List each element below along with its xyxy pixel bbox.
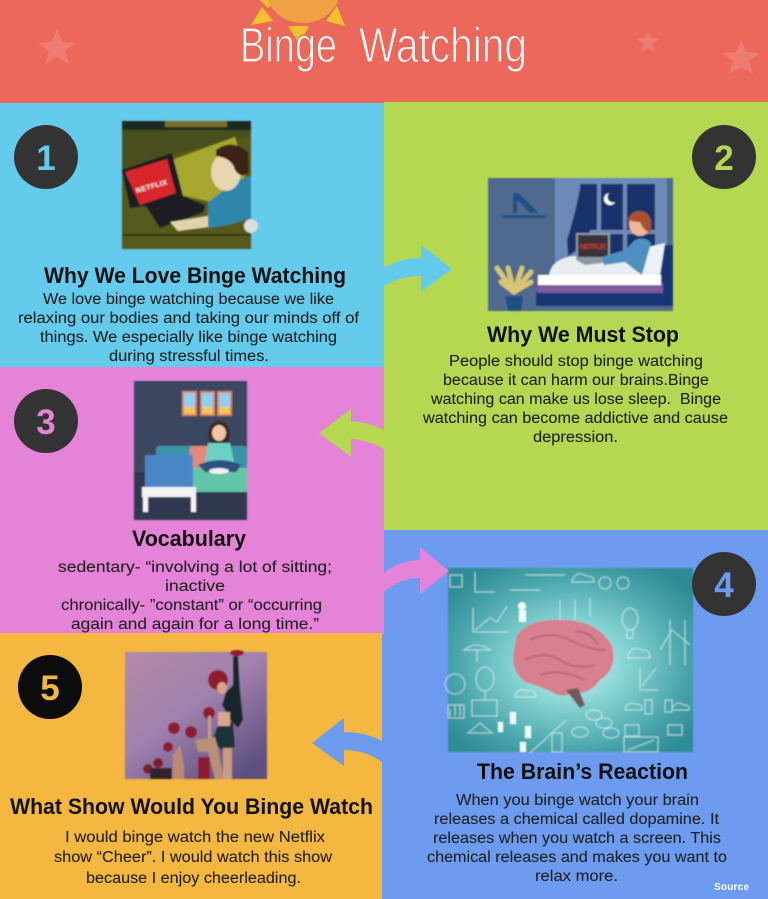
number badge 3: 3 [36,403,56,442]
body text: releases a chemical called dopamine. It [434,811,720,828]
number badge 2: 2 [714,139,734,178]
illustration: brain with white doodles [445,568,693,753]
title [240,19,527,73]
source link: Source [714,882,749,893]
header banner [0,0,768,103]
number badge 1 [14,125,78,189]
panel 3: vocabulary [0,367,384,634]
number badge 4 [692,552,756,616]
number badge 1: 1 [36,139,56,178]
body text: We love binge watching because we like [43,291,334,308]
body text [18,291,360,365]
body text: People should stop binge watching [449,353,703,370]
heading: What Show Would You Binge Watch [10,794,373,819]
icon: stars [38,29,760,74]
panel 5: what show would you binge watch [0,633,382,899]
number badge 3 [14,389,78,453]
number badge 2 [692,125,756,189]
number badge 4: 4 [714,566,734,605]
body text: watching can become addictive and cause [422,410,728,427]
body text [54,829,333,887]
illustration: woman on couch with TV [134,381,247,520]
illustration: person watching Netflix on laptop [122,121,258,249]
body text: because it can harm our brains.Binge [443,372,709,389]
body text: depression. [533,429,618,446]
heading: Why We Must Stop [487,322,679,347]
body text: relax more. [535,868,618,885]
body text: chemical releases and makes you want to [427,849,727,866]
body text: things. We especially like binge watching [40,329,337,346]
body text: inactive [165,578,225,595]
body text: When you binge watch your brain [456,792,699,809]
arrow: panel 3 to 4 [384,547,449,594]
body text: because I enjoy cheerleading. [86,870,301,887]
number badge 5 [18,655,82,719]
illustration: person in bed with laptop at night: NETFLIX [580,244,606,251]
title: Watching [359,19,527,73]
body text [58,559,332,633]
title: Binge [240,19,337,73]
body text: show “Cheer”. I would watch this show [54,849,333,866]
arrow: panel 4 to 5 [312,718,382,766]
number badge 5: 5 [40,669,60,708]
illustration: person in bed with laptop at night [488,178,673,311]
body text: sedentary- “involving a lot of sitting; [58,559,332,576]
body text [427,792,727,885]
body text: during stressful times. [109,348,269,365]
panel 2: why we must stop [384,102,768,530]
body text: watching can make us lose sleep. Binge [430,391,721,408]
arrow: panel 2 to 3 [319,409,384,457]
heading: The Brain’s Reaction [477,759,688,784]
heading: Why We Love Binge Watching [44,263,346,288]
panel 4: the brain's reaction [381,530,768,899]
body text: chronically- ”constant” or “occurring [61,597,322,614]
photo: cheerleaders [125,650,267,779]
body text: I would binge watch the new Netflix [65,829,325,846]
heading: Vocabulary [132,526,247,551]
illustration: person watching Netflix on laptop: NETFLIX [135,179,168,195]
body text: relaxing our bodies and taking our minds off of [18,310,360,327]
body text [422,353,728,446]
panel 1: why we love binge watching [0,103,384,368]
icon: sun [251,0,345,44]
body text: again and again for a long time.” [71,616,319,633]
body text: releases when you watch a screen. This [433,830,721,847]
arrow: panel 1 to 2 [384,245,452,292]
